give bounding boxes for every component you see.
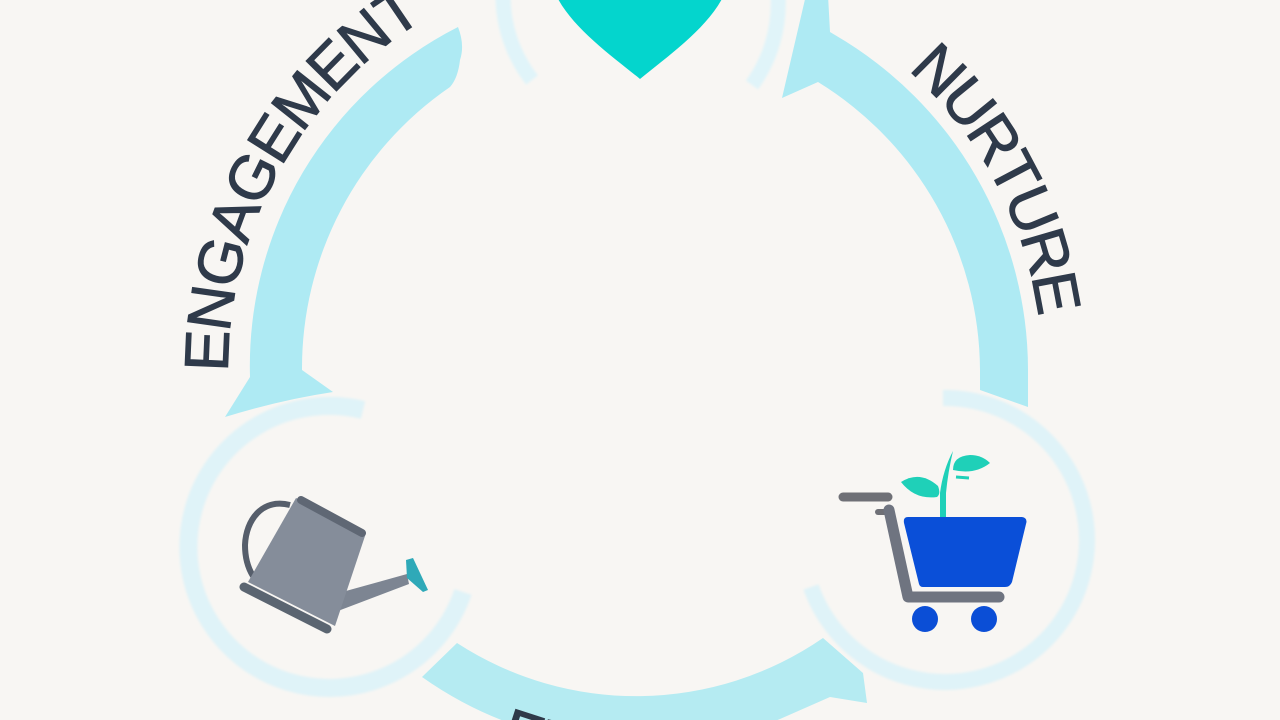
icon: heart xyxy=(556,0,724,79)
ring: watering can node xyxy=(188,406,463,688)
ring: cart node xyxy=(811,398,1087,682)
can body xyxy=(248,498,366,626)
label: nurture: NURTURE xyxy=(911,42,1081,315)
cart grip xyxy=(878,509,890,515)
arrow: engagement arc xyxy=(225,27,462,417)
ring: top node xyxy=(503,0,778,85)
icon: watering can xyxy=(244,498,428,629)
cart frame xyxy=(889,510,999,597)
can spout xyxy=(330,574,409,614)
can handle xyxy=(245,504,290,576)
cart right wheel xyxy=(971,606,997,632)
can spout head xyxy=(406,558,428,592)
plant stem xyxy=(940,451,953,517)
cart handle xyxy=(843,492,888,502)
can top rim xyxy=(301,500,362,533)
arrow: nurture arc xyxy=(782,0,1028,407)
leaf accent xyxy=(956,477,969,478)
can bottom rim xyxy=(244,587,327,629)
cart left wheel xyxy=(912,606,938,632)
cart basket xyxy=(904,517,1026,587)
plant left leaf xyxy=(901,477,939,497)
plant right leaf xyxy=(953,455,990,471)
icon: shopping cart with plant xyxy=(843,451,1026,632)
arrow: bottom arc xyxy=(422,638,867,720)
